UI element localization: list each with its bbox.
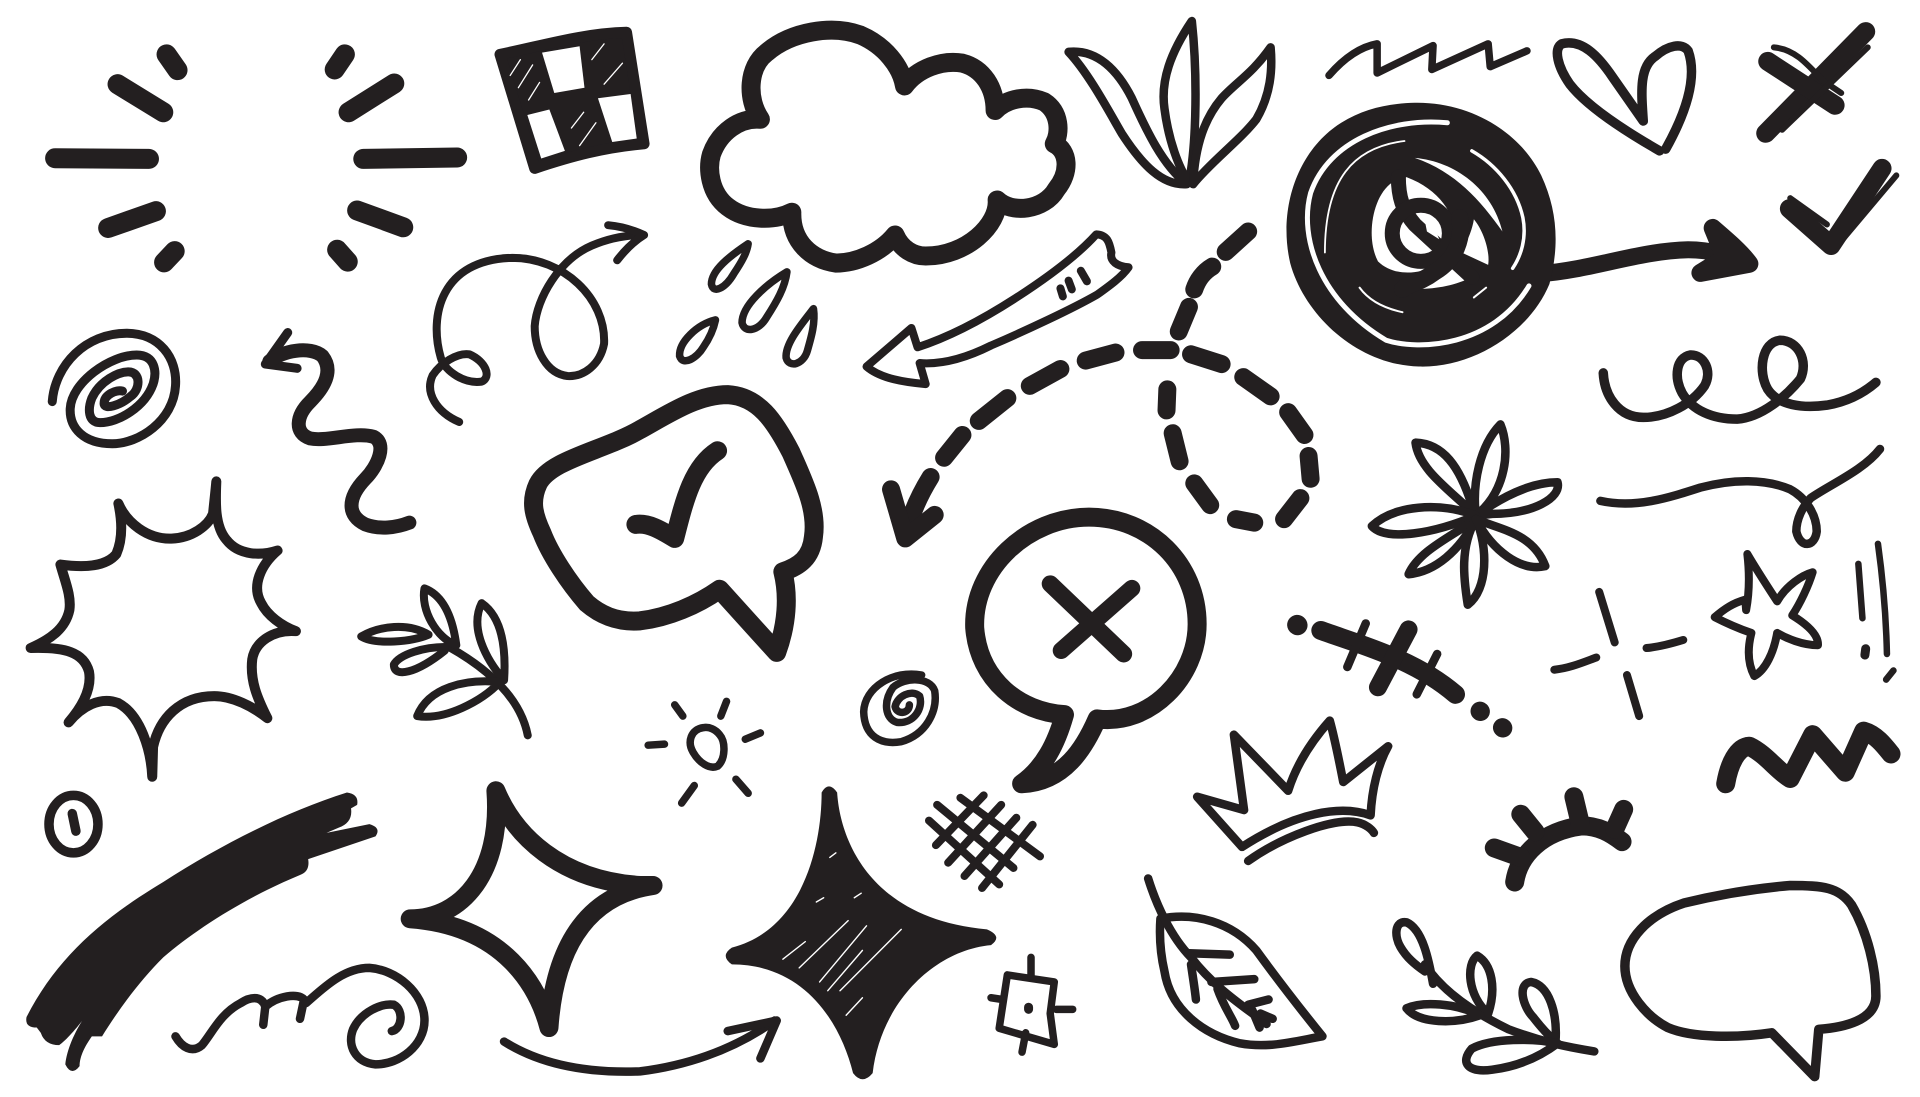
arrow: ribbon pointing left bbox=[867, 234, 1129, 384]
icon: thick zigzag bbox=[1726, 731, 1891, 784]
icon: cross-hatch grid bbox=[929, 795, 1040, 888]
icon: scribbled check mark bbox=[1789, 168, 1896, 246]
icon: empty speech bubble bbox=[1625, 885, 1876, 1077]
icon: speech bubble with cross bbox=[975, 517, 1197, 784]
icon: rain drops bbox=[680, 244, 814, 364]
icon: closed eye with lashes bbox=[1494, 797, 1624, 882]
arrow: from scribble circle to right bbox=[1541, 228, 1749, 274]
icon: checkered flag bbox=[500, 32, 644, 168]
icon: speech bubble with check mark bbox=[534, 395, 814, 652]
icon: thick brush stroke bbox=[26, 793, 378, 1071]
icon: right burst lines bbox=[335, 54, 457, 262]
icon: filled sparkle bbox=[726, 786, 996, 1079]
icon: scribbled cross bbox=[1766, 32, 1868, 133]
icon: star bbox=[1715, 554, 1818, 676]
icon: heart bbox=[1557, 43, 1692, 151]
icon: three leaves bbox=[1069, 21, 1271, 184]
icon: scribble circle bbox=[1286, 103, 1556, 367]
icon: left burst lines bbox=[55, 54, 178, 262]
icon: light bulb rays bbox=[648, 701, 760, 803]
arrow: bottom swoosh bbox=[504, 1021, 777, 1072]
arrow: squiggle pointing left bbox=[265, 333, 409, 528]
icon: comic starburst bbox=[31, 481, 296, 777]
icon: veined leaf bbox=[1148, 878, 1322, 1045]
icon: small leafy branch bbox=[361, 588, 528, 735]
icon: curly line bbox=[1603, 340, 1876, 419]
icon: small spiral bbox=[864, 674, 935, 742]
icon: curly swirl bbox=[176, 968, 424, 1064]
icon: exclamation marks bbox=[1858, 544, 1893, 680]
icon: stitched line with dots bbox=[1297, 623, 1503, 728]
icon: outlined sparkle bbox=[410, 791, 653, 1028]
arrow: dashed looping arrow bbox=[891, 232, 1311, 538]
icon: cloud bbox=[710, 30, 1066, 263]
icon: branch with leaves bbox=[1396, 922, 1594, 1070]
icon: crown bbox=[1197, 721, 1388, 861]
arrow: looping curl bbox=[430, 225, 644, 422]
icon: spiral bbox=[52, 333, 176, 444]
icon: wave with loop bbox=[1600, 449, 1880, 544]
icon: small square with ticks bbox=[991, 957, 1073, 1052]
icon: four-line sparkle bbox=[1554, 592, 1683, 716]
icon: flower bbox=[1372, 424, 1558, 605]
icon: small circle bbox=[49, 795, 98, 853]
icon: thin zigzag bbox=[1329, 44, 1527, 75]
